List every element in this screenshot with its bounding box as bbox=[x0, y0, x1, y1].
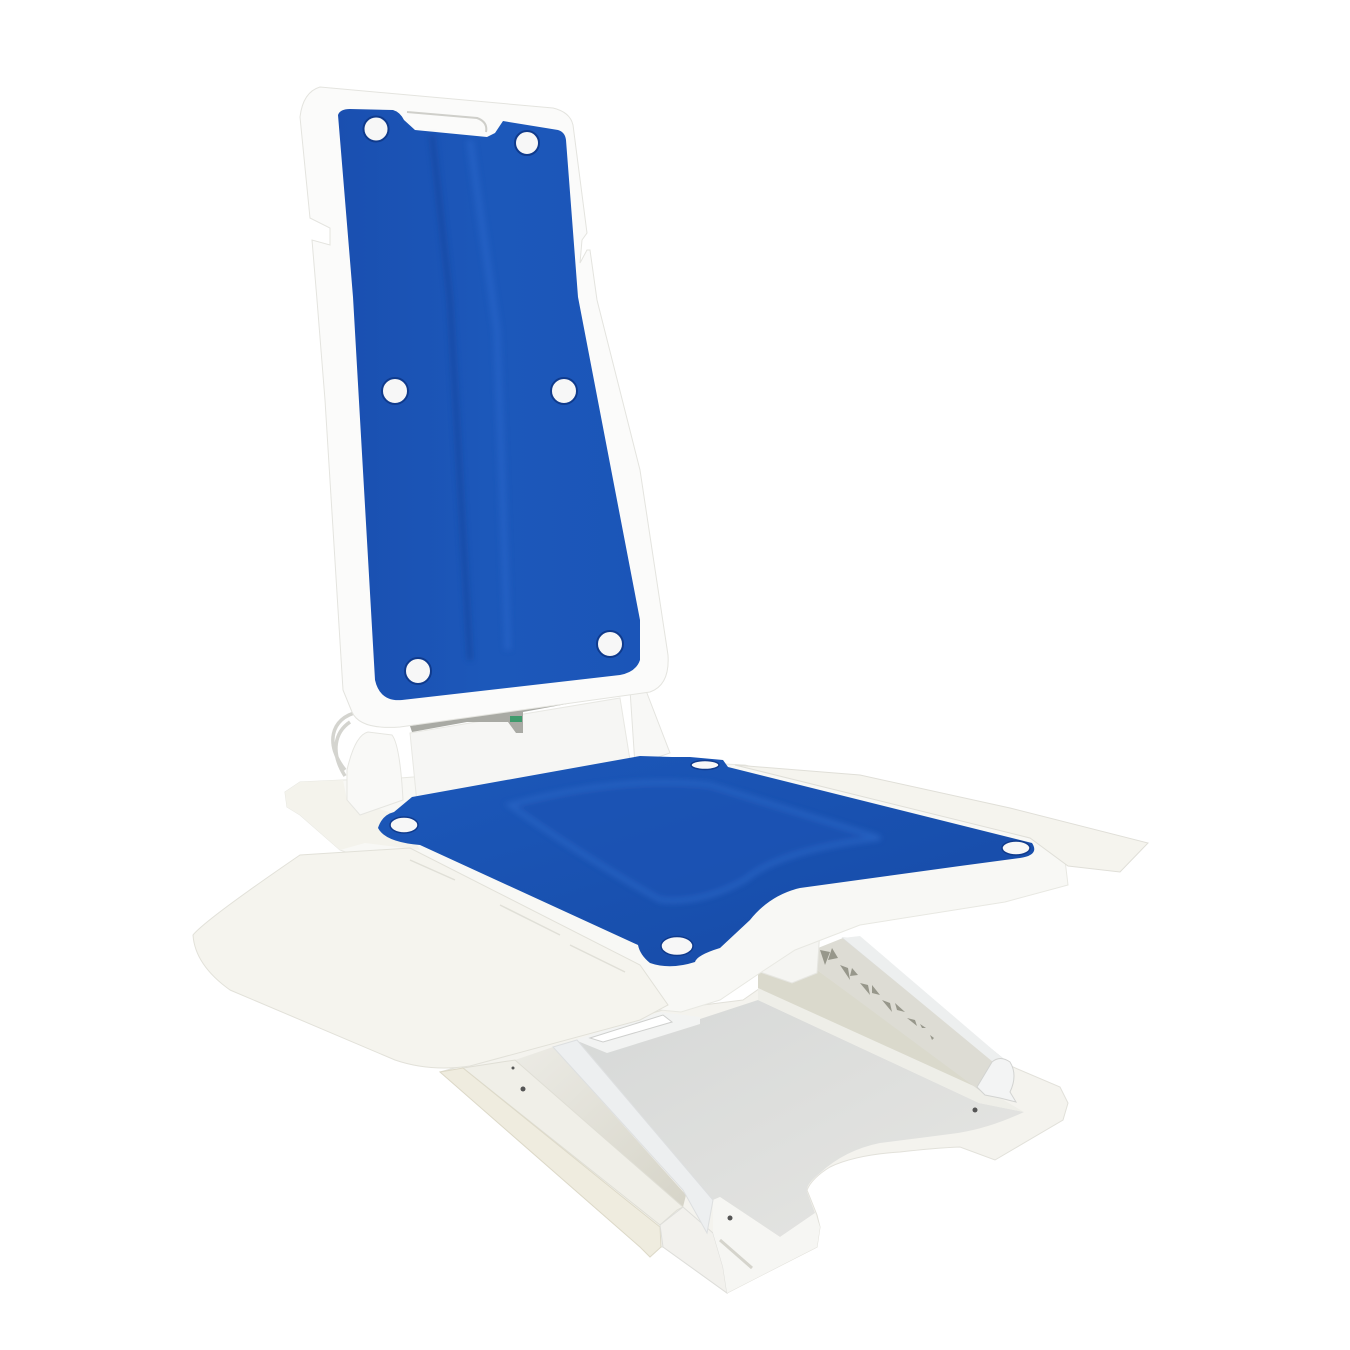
seat fixing dots bbox=[390, 760, 1030, 956]
base hull bbox=[440, 938, 1068, 1293]
front end block bbox=[660, 1207, 727, 1293]
right hinge strut bbox=[630, 688, 670, 765]
backrest white frame bbox=[300, 87, 668, 727]
handle slot in plate bbox=[590, 1015, 672, 1042]
rear rail light strip bbox=[758, 988, 1024, 1112]
handle slot surround bbox=[575, 1012, 700, 1053]
flap hinge marks bbox=[410, 860, 625, 972]
rear rail channel bbox=[758, 967, 1000, 1100]
pad crease bbox=[432, 135, 470, 660]
seat base white bbox=[285, 760, 1068, 1012]
back pad fixing dots bbox=[364, 116, 623, 684]
rear arm lattice panel bbox=[813, 938, 993, 1093]
scissor arm rear bbox=[843, 938, 1013, 1067]
seat contour shade bbox=[510, 782, 880, 901]
handle slot edge bbox=[407, 112, 486, 132]
right flap bbox=[735, 765, 1148, 872]
dark slit and wires bbox=[410, 697, 594, 733]
central roller bbox=[410, 698, 630, 803]
front rail channel bbox=[713, 1197, 820, 1293]
lower base frame bbox=[440, 936, 1068, 1293]
seat tab bbox=[755, 930, 820, 983]
scissor arm front bbox=[553, 1040, 713, 1233]
backrest blue pad bbox=[338, 109, 640, 700]
left hinge block bbox=[347, 732, 403, 815]
base grey plate bbox=[577, 1000, 1024, 1237]
rear hinge bbox=[977, 1058, 1016, 1102]
screws bbox=[512, 1066, 978, 1220]
lattice holes bbox=[820, 948, 934, 1040]
left rail bbox=[463, 1060, 683, 1225]
power cable bbox=[333, 712, 358, 776]
backrest hinge block bbox=[347, 688, 670, 815]
seat blue pad bbox=[378, 756, 1034, 966]
triangle panel under front arm bbox=[515, 1047, 686, 1207]
cable strip along left rail bbox=[440, 1068, 661, 1257]
left flap bbox=[193, 848, 668, 1068]
